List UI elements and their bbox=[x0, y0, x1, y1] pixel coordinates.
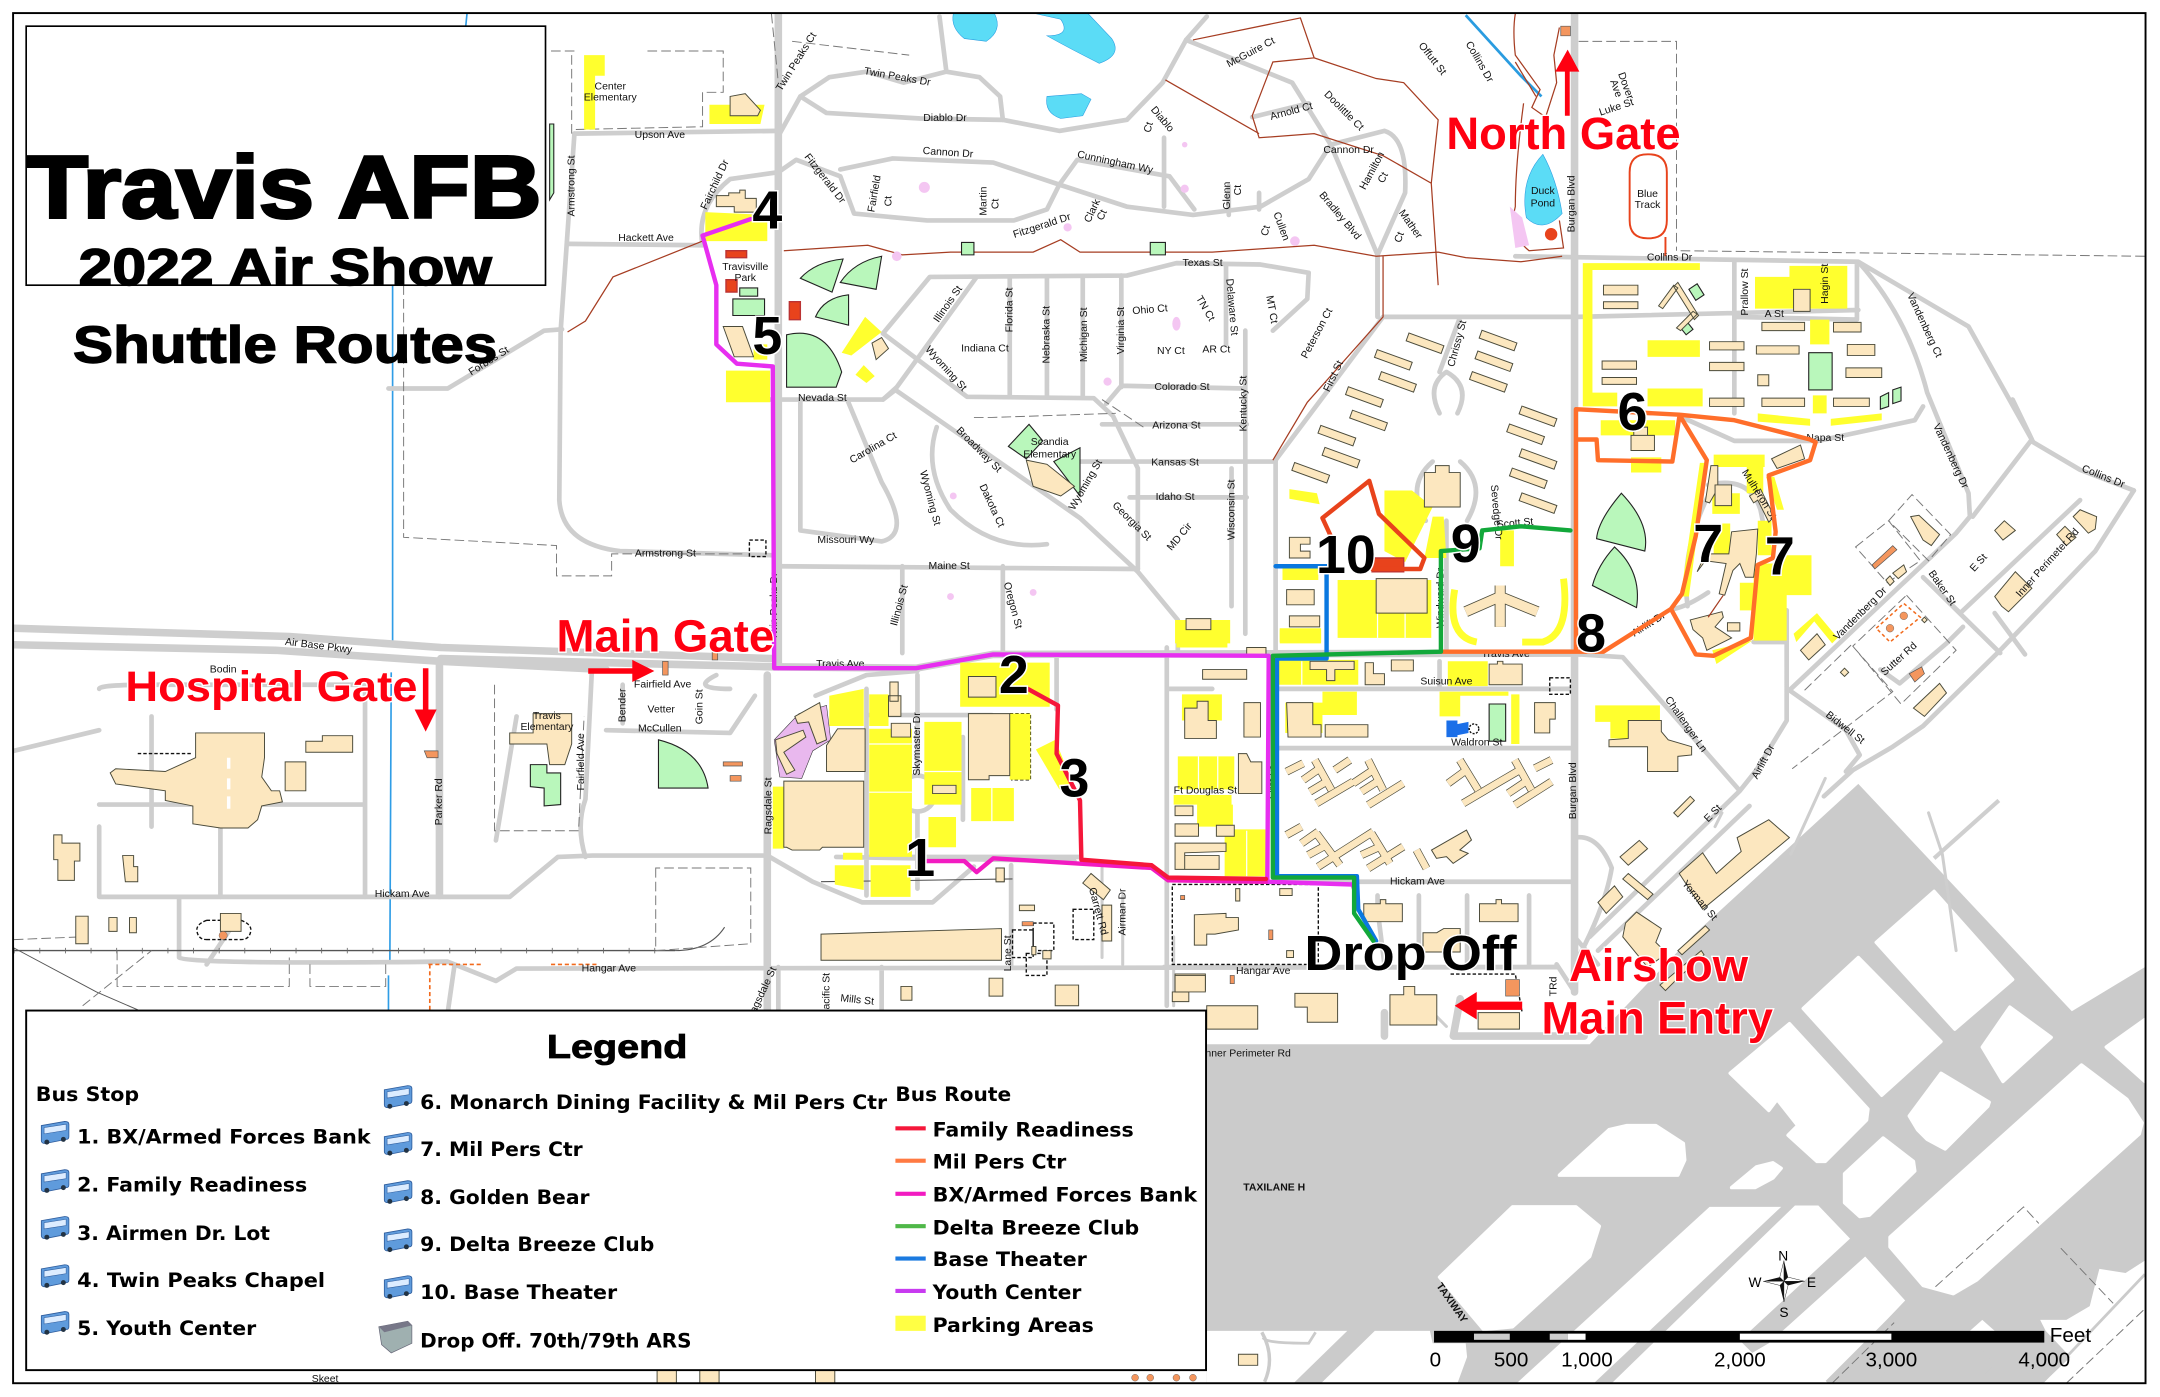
scale bar: 2,000 bbox=[1714, 1349, 1766, 1372]
delta breeze club bbox=[1466, 586, 1537, 627]
street labels: TN Ct bbox=[1193, 294, 1216, 323]
street labels: Hangar Ave bbox=[1236, 966, 1291, 977]
street labels: Clark bbox=[1083, 197, 1103, 224]
street labels: Bidwell St bbox=[1823, 710, 1866, 747]
street labels: Armstrong St bbox=[566, 155, 577, 216]
street labels: Fairchild Dr bbox=[699, 158, 732, 211]
title box bbox=[26, 26, 546, 374]
street labels: Luke St bbox=[1598, 97, 1635, 119]
street labels: Kentucky St bbox=[1239, 376, 1250, 432]
scale bar: Feet bbox=[2050, 1324, 2091, 1347]
stop numbers bbox=[752, 181, 1795, 888]
street labels: Park bbox=[735, 273, 757, 284]
street labels: Inner Perimeter Rd bbox=[1203, 1049, 1291, 1060]
street labels: Bradley Blvd bbox=[1316, 190, 1363, 242]
stop numbers: 1 bbox=[905, 828, 935, 888]
street labels: Bender bbox=[617, 688, 628, 722]
street labels: Pond bbox=[1531, 199, 1555, 210]
street labels: Elementary bbox=[584, 93, 637, 104]
street labels: Duck bbox=[1531, 186, 1556, 197]
stop numbers: 8 bbox=[1576, 604, 1606, 664]
street labels: Texas St bbox=[1183, 258, 1223, 269]
street labels: Illinois St bbox=[889, 584, 911, 627]
street labels: Track bbox=[1635, 200, 1661, 211]
street labels: Doolittle Ct bbox=[1322, 89, 1366, 133]
street labels: Wyoming St bbox=[917, 469, 942, 527]
street labels: Ragsdale St bbox=[763, 777, 774, 834]
street labels: Travis Ave bbox=[1482, 649, 1530, 660]
street labels: Waldron St bbox=[1451, 737, 1502, 748]
street labels: Mather bbox=[1396, 208, 1424, 241]
street labels: Dover bbox=[1615, 71, 1635, 101]
dormitory clusters bbox=[1286, 760, 1551, 868]
legend title: Legend bbox=[547, 1029, 687, 1066]
street labels: McCullen bbox=[638, 724, 682, 735]
street labels: NY Ct bbox=[1157, 346, 1185, 357]
street labels: Burgan Blvd bbox=[1568, 762, 1579, 819]
street labels: Dakota Ct bbox=[977, 483, 1006, 529]
street labels: Elementary bbox=[520, 722, 574, 733]
street labels: Diablo Dr bbox=[923, 113, 967, 124]
street labels: Diablo bbox=[1148, 105, 1176, 135]
street labels: Airman Dr bbox=[1117, 888, 1128, 936]
street labels: Missouri Wy bbox=[817, 535, 875, 546]
east side buildings bbox=[1800, 510, 2097, 716]
street labels: Ave bbox=[1607, 78, 1624, 99]
stop numbers: 9 bbox=[1451, 514, 1481, 574]
street labels: Colorado St bbox=[1154, 382, 1210, 393]
street labels: Idaho St bbox=[1156, 492, 1195, 503]
bus stop list: 5. Youth Center bbox=[77, 1317, 257, 1340]
south east buildings bbox=[1679, 820, 1789, 909]
gate labels: Hospital Gate bbox=[125, 663, 417, 711]
route: delta breeze club bbox=[1273, 526, 1570, 941]
bus route key: Delta Breeze Club bbox=[933, 1216, 1139, 1239]
scale bar: 0 bbox=[1430, 1349, 1441, 1372]
bus route key: Family Readiness bbox=[933, 1119, 1134, 1142]
street labels: Suisun Ave bbox=[1420, 677, 1473, 688]
street labels: Ohio Ct bbox=[1132, 303, 1168, 317]
bus stop list: Drop Off. 70th/79th ARS bbox=[420, 1329, 692, 1352]
street labels: Vandenberg Dr bbox=[1832, 585, 1890, 643]
central buildings bbox=[1175, 619, 1266, 869]
route: mil pers ctr bbox=[1441, 409, 1816, 656]
street labels: Hamilton bbox=[1358, 150, 1387, 192]
street labels: Wyoming St bbox=[1067, 458, 1105, 512]
bus stop list: 2. Family Readiness bbox=[77, 1174, 307, 1197]
gate labels: Drop Off bbox=[1305, 925, 1517, 981]
route: youth center bbox=[703, 219, 1357, 898]
street labels: Mulheron St bbox=[1739, 468, 1778, 522]
stop numbers: 10 bbox=[1316, 525, 1376, 585]
street labels: Ragsdale St bbox=[745, 965, 779, 1022]
hospital bbox=[110, 733, 282, 828]
street labels: Fairfield Ave bbox=[576, 733, 587, 791]
street labels: Delaware St bbox=[1223, 278, 1239, 336]
street labels: Broadway St bbox=[954, 425, 1003, 475]
street labels: Maine St bbox=[929, 561, 970, 572]
stop numbers: 2 bbox=[999, 645, 1029, 705]
street labels: Parker Rd bbox=[434, 778, 445, 825]
street labels: Ct bbox=[1376, 171, 1391, 185]
compass: N bbox=[1778, 1249, 1788, 1264]
street labels: Inner Perimeter Rd bbox=[2014, 527, 2082, 600]
street labels: TRd bbox=[1549, 976, 1560, 996]
street labels: Twin Peaks Dr bbox=[769, 572, 780, 640]
bus routes bbox=[703, 219, 1816, 941]
street labels: Ct bbox=[991, 199, 1002, 209]
street labels: Air Base Pkwy bbox=[284, 637, 353, 656]
red arrows bbox=[415, 50, 1579, 1020]
sports fields bbox=[530, 124, 1901, 806]
title box: Travis AFB bbox=[28, 138, 541, 237]
scale bar: 500 bbox=[1494, 1349, 1528, 1372]
street labels: Fitzgerald Dr bbox=[802, 152, 847, 206]
street labels: Carolina Ct bbox=[848, 430, 899, 466]
street labels: Sutter Rd bbox=[1879, 640, 1920, 678]
street labels: Windward Dr bbox=[1436, 567, 1447, 628]
street labels: Travis Ave bbox=[816, 659, 865, 670]
street labels: Napa St bbox=[1806, 433, 1844, 444]
street labels: Pacific St bbox=[821, 973, 832, 1016]
gate labels bbox=[125, 108, 1774, 1043]
lakes and water bbox=[388, 14, 1562, 1047]
bus route key: Mil Pers Ctr bbox=[933, 1150, 1067, 1173]
compass: E bbox=[1807, 1275, 1816, 1290]
street labels: Glenn bbox=[1222, 182, 1233, 210]
bus stop list bbox=[36, 1083, 888, 1353]
street labels: Arnold Ct bbox=[1269, 101, 1314, 123]
stop numbers: 4 bbox=[752, 181, 782, 241]
street labels: MT Ct bbox=[1263, 295, 1279, 325]
street labels: Wyoming St bbox=[923, 344, 968, 394]
street labels: Vandenberg Dr bbox=[1930, 422, 1970, 491]
street labels: Collins Dr bbox=[1647, 252, 1693, 263]
street labels: Florida St bbox=[1005, 288, 1015, 332]
stop numbers: 7 bbox=[1765, 527, 1795, 587]
bus route key: BX/Armed Forces Bank bbox=[933, 1183, 1198, 1206]
street labels: Prallow St bbox=[1740, 268, 1751, 316]
bus stop list: 8. Golden Bear bbox=[420, 1186, 590, 1209]
street labels: TAXILANE H bbox=[1243, 1182, 1305, 1193]
scale bar: 3,000 bbox=[1866, 1349, 1917, 1372]
street labels: Scott St bbox=[1496, 517, 1534, 531]
street labels: Fitzgerald Dr bbox=[1012, 212, 1073, 241]
bus route key bbox=[895, 1083, 1198, 1337]
bus route key: Bus Route bbox=[895, 1083, 1011, 1106]
north housing block bbox=[1602, 285, 1882, 451]
street labels: Ct bbox=[1260, 224, 1273, 237]
bus route key: Youth Center bbox=[932, 1281, 1082, 1304]
street labels: Fairfield bbox=[866, 174, 884, 213]
bus stop list: 7. Mil Pers Ctr bbox=[420, 1138, 583, 1161]
street labels: Burgan Blvd bbox=[1567, 175, 1578, 232]
street labels: Garrett Rd bbox=[1086, 886, 1109, 937]
street labels: Travisville bbox=[722, 262, 768, 273]
scale bar bbox=[1430, 1328, 2091, 1369]
gate labels: Airshow bbox=[1569, 940, 1749, 991]
route: theater loop bbox=[1322, 481, 1424, 569]
compass: W bbox=[1749, 1275, 1761, 1290]
gate labels: Main Gate bbox=[557, 611, 774, 662]
street labels: Forbes St bbox=[467, 345, 511, 378]
stop numbers: 5 bbox=[752, 306, 782, 366]
street labels: Sevedge Dr bbox=[1488, 484, 1504, 541]
bus stop list: 1. BX/Armed Forces Bank bbox=[77, 1125, 372, 1149]
street labels: Cannon Dr bbox=[922, 146, 974, 160]
street labels: Oregon St bbox=[1001, 581, 1024, 630]
road network bbox=[14, 14, 2134, 1036]
street labels: Nevada St bbox=[798, 393, 847, 404]
bus stop list: 10. Base Theater bbox=[420, 1281, 618, 1304]
street labels: Hangar Ave bbox=[582, 963, 636, 974]
street labels: Elementary bbox=[1023, 449, 1077, 460]
street labels: Michigan St bbox=[1079, 307, 1090, 362]
street labels: Twin Peaks Ct bbox=[774, 31, 819, 93]
travis elementary bbox=[510, 714, 572, 765]
street labels: Ft Douglas St bbox=[1174, 786, 1237, 797]
bus stop list: Bus Stop bbox=[36, 1083, 139, 1106]
street labels: Kansas St bbox=[1151, 458, 1199, 469]
street labels: E St bbox=[1702, 803, 1724, 825]
street labels: Peterson Ct bbox=[1300, 307, 1335, 361]
mil pers buildings bbox=[1690, 445, 1805, 650]
trails bbox=[568, 14, 1667, 460]
street labels: Offutt St bbox=[1416, 41, 1448, 78]
west side misc bbox=[716, 94, 889, 360]
street labels: Mills St bbox=[840, 993, 875, 1008]
route: BX / Armed Forces Bank bbox=[920, 858, 1266, 882]
street labels: Travis bbox=[533, 711, 561, 722]
street labels: Hagin St bbox=[1820, 264, 1831, 304]
compass: S bbox=[1779, 1305, 1789, 1320]
street labels: Ct bbox=[883, 196, 894, 206]
street labels: TAXIWAY bbox=[1434, 1281, 1469, 1325]
street labels: Chrissy St bbox=[1446, 319, 1469, 368]
scale bar: 1,000 bbox=[1561, 1349, 1613, 1372]
street labels: Collins Dr bbox=[1463, 40, 1495, 85]
route: base theater bbox=[1276, 566, 1376, 941]
street labels: Baker St bbox=[1926, 569, 1958, 608]
street labels: Yorman St bbox=[1679, 879, 1719, 923]
legend panel bbox=[26, 1011, 1206, 1370]
street labels: Twin Peaks Dr bbox=[863, 66, 932, 89]
street labels: MD Cir bbox=[1165, 521, 1195, 553]
street labels: AR Ct bbox=[1202, 345, 1230, 356]
street labels: Armstrong St bbox=[635, 549, 696, 560]
street labels: Martin bbox=[978, 186, 989, 216]
airfield pavement bbox=[1207, 784, 2145, 1383]
street labels: Vetter bbox=[648, 704, 675, 715]
street labels: Ct bbox=[1095, 208, 1110, 222]
gate labels: North Gate bbox=[1446, 108, 1681, 159]
bus stop list: 9. Delta Breeze Club bbox=[420, 1233, 654, 1256]
south row buildings bbox=[1172, 889, 1519, 1029]
street labels: Scandia bbox=[1031, 437, 1069, 448]
street labels: First St bbox=[1268, 766, 1279, 799]
street labels: Illinois St bbox=[932, 284, 965, 325]
street labels: Nebraska St bbox=[1042, 306, 1053, 364]
street labels: Ct bbox=[1393, 231, 1407, 244]
street labels: Airlift Dr bbox=[1750, 743, 1778, 781]
street labels: Hickam Ave bbox=[1390, 876, 1445, 887]
street labels: Collins Dr bbox=[2080, 464, 2127, 491]
street labels: Lane St bbox=[1003, 935, 1014, 971]
stop numbers: 3 bbox=[1060, 748, 1089, 808]
street labels: Cullen bbox=[1270, 211, 1291, 242]
bus stop list: 6. Monarch Dining Facility & Mil Pers Ctr bbox=[420, 1091, 888, 1114]
street labels: Goin St bbox=[695, 689, 706, 724]
street labels: First St bbox=[1322, 359, 1346, 394]
street labels: Bodin bbox=[210, 664, 237, 675]
street labels: Arizona St bbox=[1152, 420, 1201, 431]
street labels: Skeet bbox=[312, 1374, 339, 1385]
bus stop list: 4. Twin Peaks Chapel bbox=[77, 1269, 325, 1292]
title box: 2022 Air Show bbox=[79, 239, 492, 297]
street labels: Hickam Ave bbox=[375, 889, 430, 900]
street labels: McGuire Ct bbox=[1225, 36, 1277, 70]
street labels: Wisconsin St bbox=[1226, 479, 1237, 540]
parking areas bbox=[584, 55, 1882, 897]
boundary lines bbox=[14, 14, 2145, 1013]
bus route key: Parking Areas bbox=[933, 1314, 1094, 1337]
street labels: Ct bbox=[1143, 121, 1156, 134]
BX complex bbox=[774, 705, 831, 778]
street labels: Skymaster Dr bbox=[912, 712, 923, 776]
street labels: Virginia St bbox=[1116, 307, 1127, 354]
stop numbers: 7 bbox=[1693, 514, 1723, 574]
barracks bbox=[1292, 330, 1557, 513]
compass bbox=[1749, 1249, 1816, 1320]
route: family readiness bbox=[1028, 689, 1266, 879]
street labels: Challenger Ln bbox=[1662, 695, 1709, 755]
street labels: Cannon Dr bbox=[1323, 145, 1374, 156]
scale bar: 4,000 bbox=[2018, 1349, 2070, 1372]
street labels: A St bbox=[1765, 309, 1784, 320]
street labels: Fairfield Ave bbox=[634, 679, 691, 690]
street labels: Indiana Ct bbox=[961, 343, 1009, 354]
street labels: Upson Ave bbox=[635, 130, 685, 141]
title box: Shuttle Routes bbox=[73, 316, 497, 374]
street labels: Blue bbox=[1637, 189, 1658, 200]
bus stop list: 3. Airmen Dr. Lot bbox=[77, 1222, 270, 1245]
street labels: Airlift Dr bbox=[1630, 610, 1668, 639]
street labels: E St bbox=[1968, 552, 1990, 574]
street labels: Georgia St bbox=[1110, 500, 1153, 543]
street labels: Hackett Ave bbox=[618, 233, 674, 244]
street labels: Vandenberg Ct bbox=[1904, 292, 1944, 359]
street labels: Cunningham Wy bbox=[1076, 149, 1155, 176]
stop numbers: 6 bbox=[1617, 382, 1647, 442]
street labels: Center bbox=[595, 82, 626, 93]
gate labels: Main Entry bbox=[1541, 992, 1774, 1043]
street labels: Ct bbox=[1233, 185, 1244, 195]
bus route key: Base Theater bbox=[933, 1248, 1087, 1271]
